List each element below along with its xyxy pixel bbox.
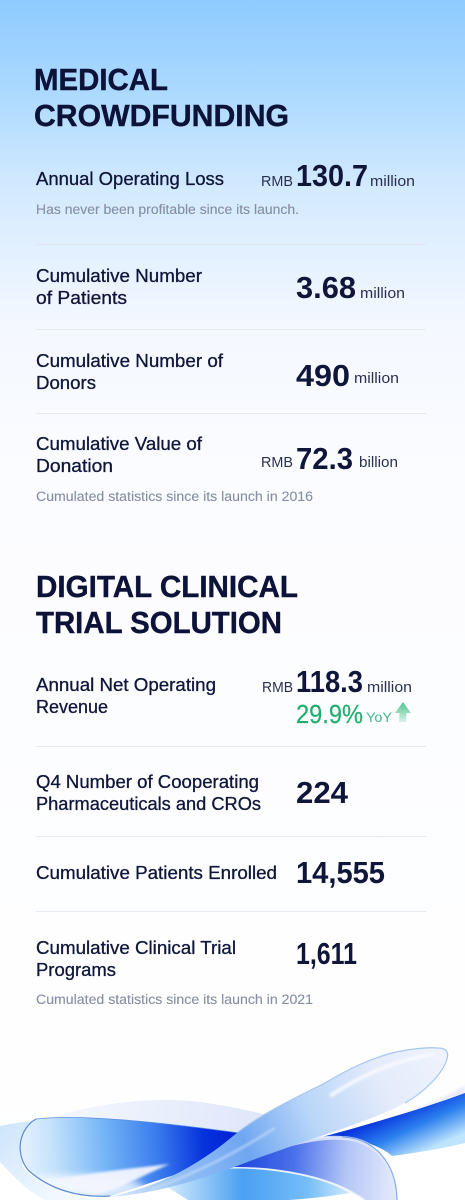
metric: cumulative clinical trial programs: Cumulative Clinical Trial [36,938,236,958]
icon: up arrow [395,702,411,722]
metric: annual operating loss: 130.7 [296,158,368,193]
metric: cumulative patients enrolled: 14,555 [296,855,385,890]
metric: cumulative value of donation: Cumulative Value of [36,434,203,454]
metric: cumulative number of donors: million [354,370,399,387]
metric: cumulative patients enrolled [36,855,385,890]
ribbon: right fringe [392,1085,465,1118]
metric: cumulative number of donors: Donors [36,373,96,393]
ribbon: upper right leaf [108,1048,448,1197]
metric: cumulative number of patients: Cumulative Number [36,266,202,286]
metric: annual net operating revenue [36,664,412,729]
metric: annual net operating revenue: million [367,679,412,696]
panel: medical crowdfunding [34,62,426,504]
ribbon: pale left band [0,1119,95,1200]
growth: 29.9% YoY [296,699,411,729]
heading: digital clinical trial solution: DIGITAL CLINICAL [36,569,298,604]
metric: cumulative number of donors: Cumulative Number of [36,351,224,371]
metric: annual operating loss [36,158,415,217]
metric: cumulative value of donation: RMB [261,454,293,471]
illustration: glass ribbon [0,1048,465,1200]
ribbon: loop separating curve [225,1168,365,1200]
heading: medical crowdfunding: MEDICAL [34,62,168,97]
metric: annual net operating revenue: Annual Net Operating [36,675,216,695]
metric: cooperating pharmaceuticals and CROs: Pharmaceuticals and CROs [36,794,261,814]
metric: cumulative value of donation: 72.3 [296,441,353,476]
heading: medical crowdfunding: CROWDFUNDING [34,98,289,133]
metric: cooperating pharmaceuticals and CROs: 224 [296,775,349,810]
metric: annual operating loss: Annual Operating Loss [36,169,224,189]
footnote: crowdfunding statistics: Cumulated statistics since its launch in 2016 [36,489,313,504]
metric: cumulative number of patients: million [360,285,405,302]
metric: annual operating loss: Has never been profitable since its launch. [36,202,299,217]
heading: digital clinical trial solution: TRIAL SOLUTION [36,605,282,640]
metric: annual net operating revenue: Revenue [36,697,108,717]
metric: cumulative clinical trial programs: 1,611 [296,936,357,971]
heading: medical crowdfunding [34,62,289,133]
growth: 29.9% YoY: YoY [366,709,393,725]
metric: cumulative clinical trial programs [36,936,357,980]
panel: digital clinical trial solution [36,569,426,1007]
ribbon: left loop [5,1117,240,1200]
metric: cumulative clinical trial programs: Programs [36,960,116,980]
metric: cumulative number of donors: 490 [296,358,350,393]
metric: cumulative number of donors [36,351,399,393]
metric: cumulative patients enrolled: Cumulative Patients Enrolled [36,863,277,883]
growth: 29.9% YoY: 29.9% [296,699,363,729]
metric: cumulative value of donation: Donation [36,456,113,476]
ribbon: lower underbelly [167,1168,350,1200]
metric: cumulative value of donation: billion [359,454,398,471]
ribbon: lower loop [225,1137,397,1200]
metric: annual net operating revenue: 118.3 [296,664,363,699]
metric: cumulative number of patients [36,266,405,308]
metric: cooperating pharmaceuticals and CROs: Q4 Number of Cooperating [36,772,259,792]
metric: annual operating loss: RMB [261,173,293,190]
ribbon: pale back band [48,1100,272,1133]
metric: cooperating pharmaceuticals and CROs [36,772,349,814]
metric: cumulative number of patients: of Patients [36,288,127,308]
footnote: clinical trial statistics: Cumulated statistics since its launch in 2021 [36,992,313,1007]
metric: annual operating loss: million [370,173,415,190]
metric: annual net operating revenue: RMB [262,679,293,696]
ribbon: lower loop rim [292,1138,396,1200]
ribbon: right blue band [322,1093,465,1156]
metric: cumulative number of patients: 3.68 [296,270,356,305]
heading: digital clinical trial solution [36,569,298,640]
metric: cumulative value of donation [36,434,398,476]
